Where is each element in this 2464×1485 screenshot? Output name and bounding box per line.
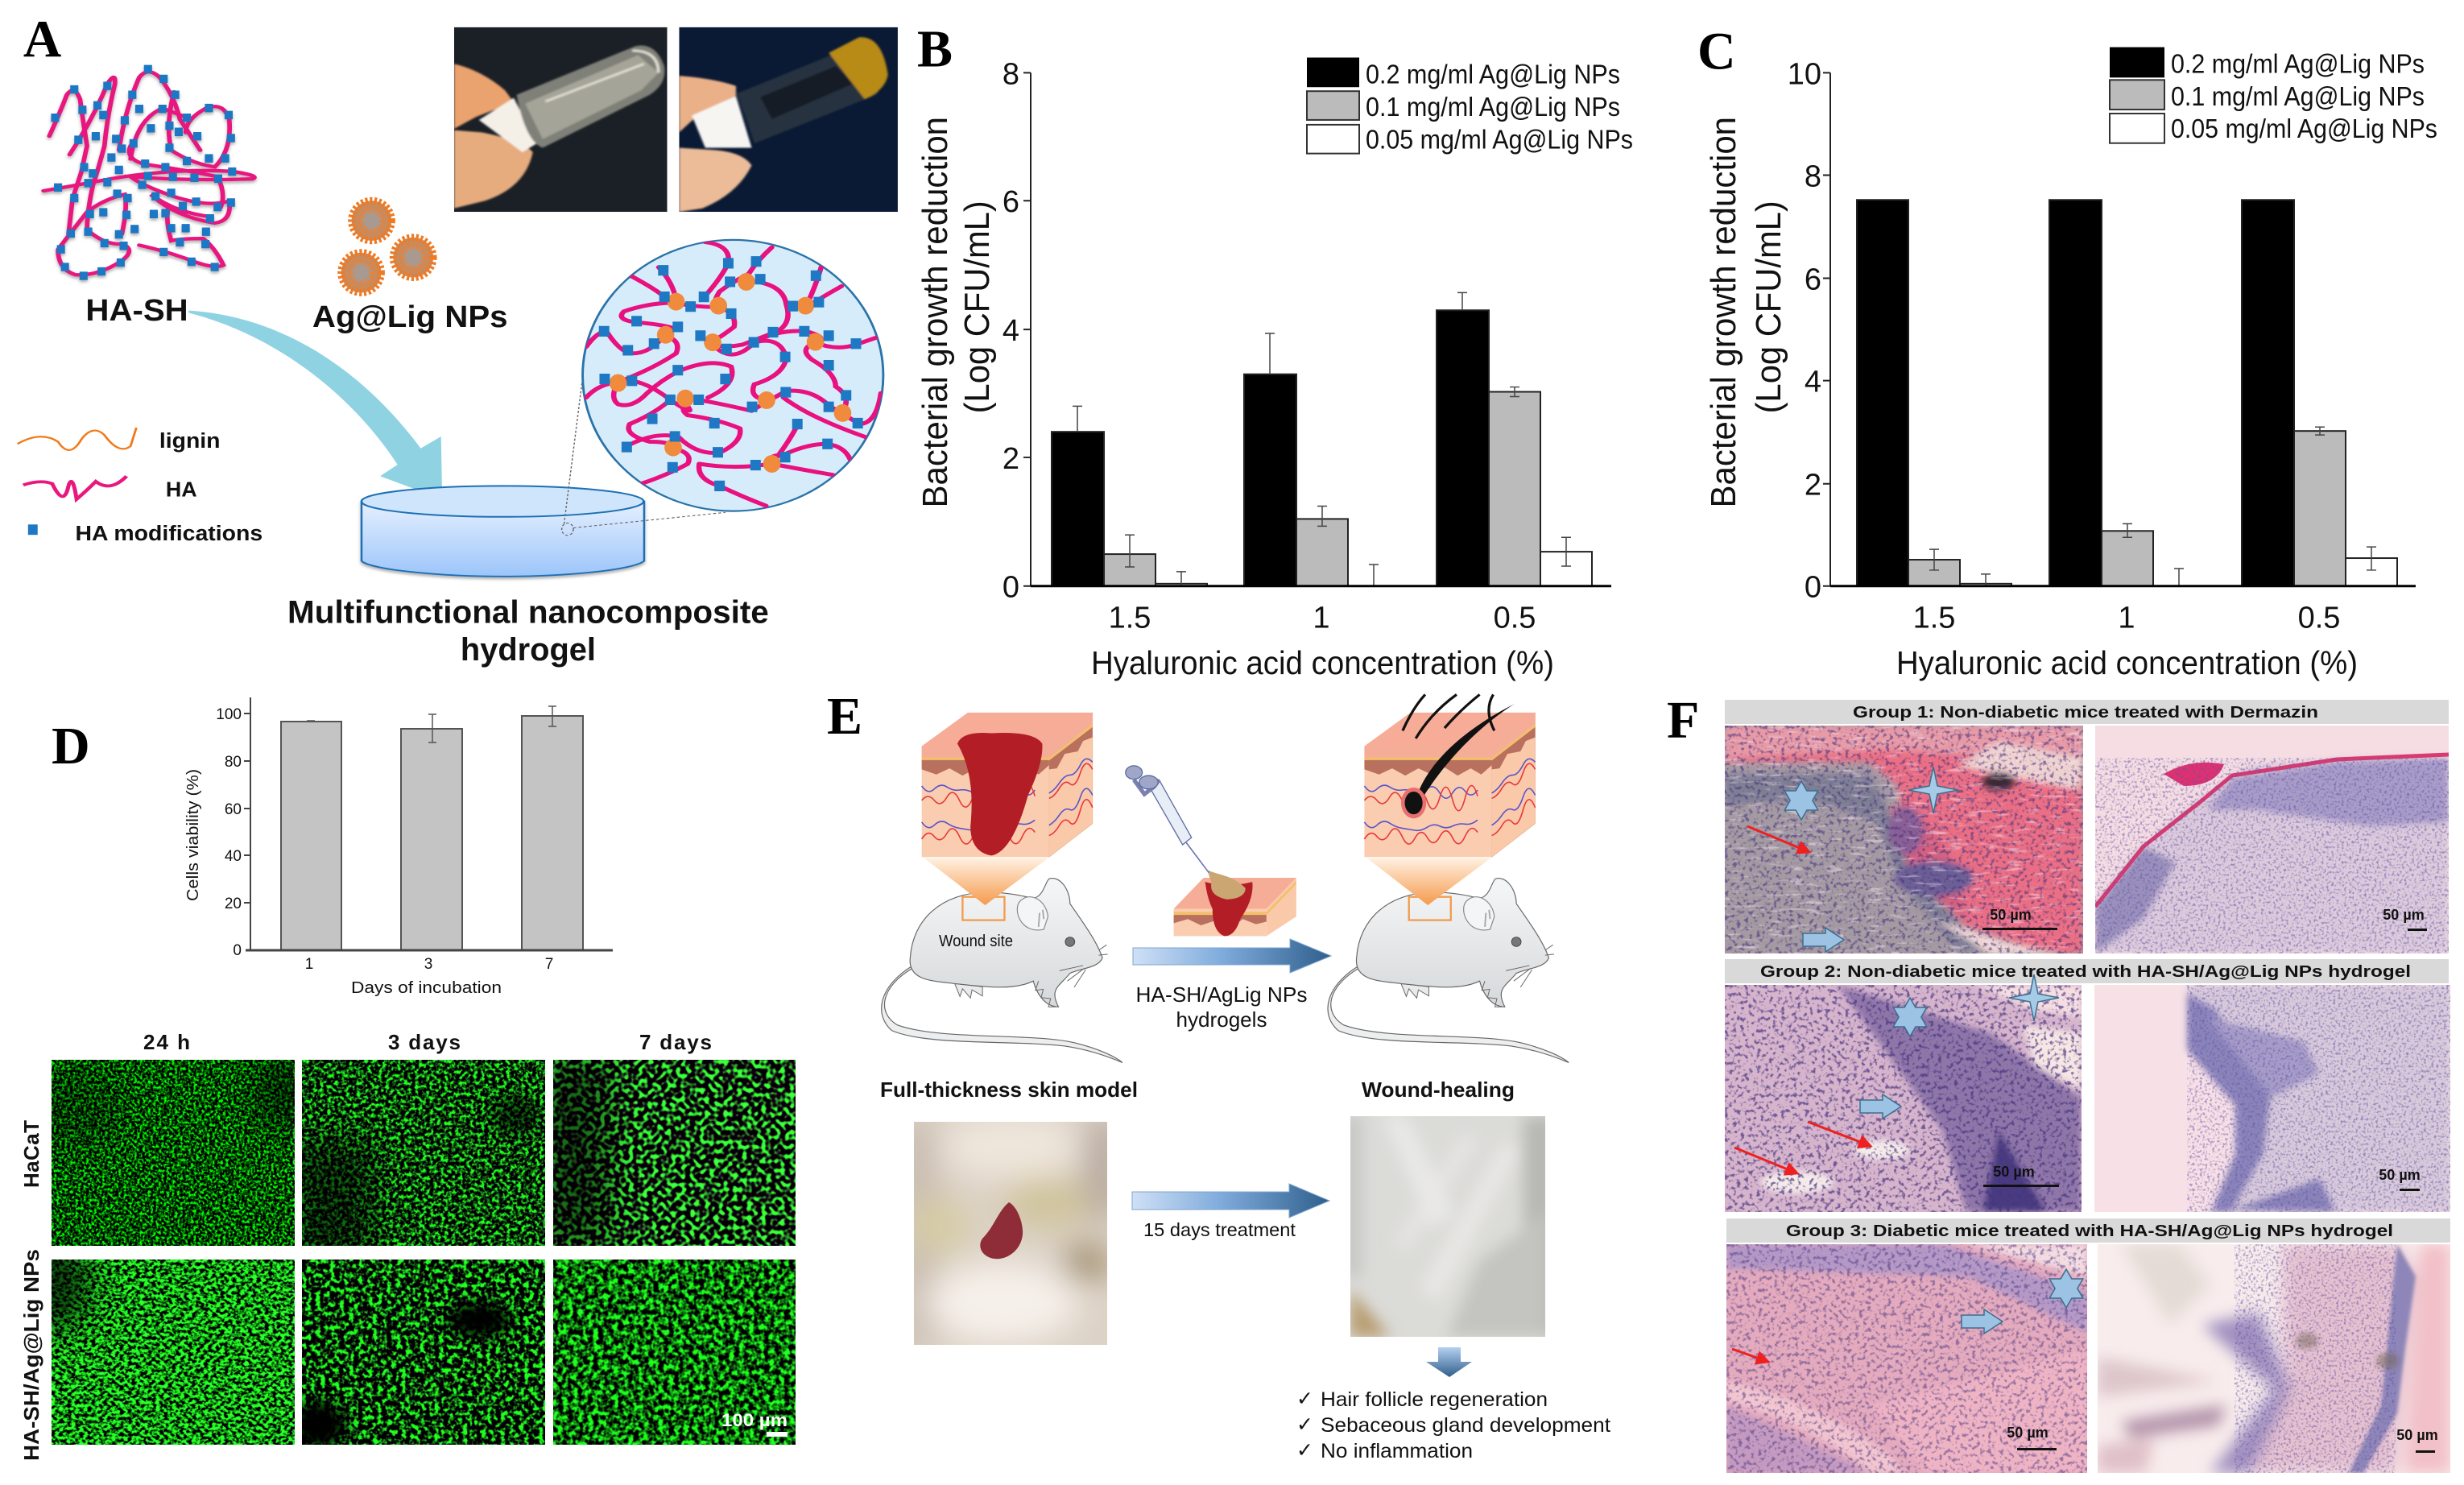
- curved arrow to dish: [188, 311, 442, 499]
- y axis and ticks: [1003, 57, 1031, 605]
- y axis and ticks: 8: [1003, 57, 1019, 91]
- row labels: HaCaT: [19, 1120, 43, 1188]
- y axis and ticks: 2: [1003, 442, 1019, 476]
- hydrogel treatment label: [1135, 982, 1308, 1032]
- hydrogel treatment label: HA-SH/AgLig NPs: [1135, 982, 1308, 1007]
- panel D: cell viability and fluorescence: [11, 697, 796, 1461]
- HA-SH label: HA-SH: [85, 294, 188, 328]
- hydrogel caption: [287, 594, 769, 668]
- legend: lignin / HA / modifications: lignin: [159, 430, 221, 453]
- error bars: [1929, 427, 2376, 586]
- x axis labels: 1: [2118, 602, 2135, 635]
- outcomes checklist: ✓: [1296, 1439, 1313, 1462]
- cell viability bar chart: 1: [305, 956, 313, 973]
- cell viability bar chart: 40: [225, 848, 242, 865]
- HA-SH polymer tangle: [43, 65, 254, 280]
- fluorescence micrograph hydrogel 7 days with scale: [553, 1260, 796, 1445]
- cell viability bar chart: 80: [225, 754, 242, 771]
- cell viability bar chart: 100: [216, 706, 242, 723]
- panel E: in vivo wound healing: [827, 687, 1610, 1462]
- outcomes checklist: Sebaceous gland development: [1321, 1414, 1610, 1437]
- fluorescence micrograph hydrogel 3 days: [302, 1260, 545, 1445]
- outcomes checklist: Hair follicle regeneration: [1321, 1388, 1548, 1411]
- baseline: [1031, 585, 1611, 587]
- x axis labels: 0.5: [1494, 602, 1536, 635]
- cell viability bar chart: 60: [225, 801, 242, 818]
- group 1 heading: Group 1: Non-diabetic mice treated with Dermazin: [1853, 704, 2318, 722]
- x axis title: Hyaluronic acid concentration (%): [1091, 644, 1554, 681]
- y axis and ticks: 4: [1003, 314, 1019, 348]
- Ag@Lig nanoparticles: [341, 201, 433, 292]
- y axis and ticks: 0: [1003, 571, 1019, 605]
- column headers: [143, 1030, 712, 1054]
- legend: [1307, 57, 1633, 155]
- bars: [1052, 310, 1592, 586]
- y axis and ticks: 4: [1805, 366, 1821, 399]
- group 1 left micrograph: [1725, 726, 2083, 953]
- y axis and ticks: 6: [1805, 263, 1821, 296]
- cell viability bar chart: Days of incubation: [351, 979, 502, 997]
- cell viability bar chart: 0: [233, 942, 242, 959]
- outcomes checklist: [1296, 1388, 1610, 1462]
- y axis title: Bacterial growth reduction: [1704, 117, 1743, 507]
- x axis labels: [1109, 602, 1536, 635]
- panel F: histology: [1667, 691, 2450, 1473]
- y axis and ticks: 10: [1788, 57, 1821, 91]
- fluorescence micrograph hydrogel 7 days with scale: 100 µm: [721, 1410, 788, 1430]
- legend: [2110, 48, 2437, 144]
- legend: 0.2 mg/ml Ag@Lig NPs: [1366, 59, 1620, 89]
- x axis labels: [1913, 602, 2340, 635]
- y axis title: (Log CFU/mL): [1749, 201, 1788, 413]
- x axis labels: 1.5: [1913, 602, 1955, 635]
- fluorescence micrograph HaCaT 3 days: [302, 1060, 545, 1246]
- group 1 right micrograph: [2095, 726, 2449, 953]
- scale bars: [1982, 907, 2438, 1453]
- y axis and ticks: 2: [1805, 469, 1821, 503]
- fluorescence micrograph HaCaT 7 days: [553, 1060, 796, 1246]
- y axis and ticks: 8: [1805, 159, 1821, 193]
- group 3 right micrograph: [2098, 1244, 2450, 1473]
- legend: lignin / HA / modifications: [18, 428, 263, 545]
- cell viability bar chart: Cells viability (%): [184, 769, 202, 901]
- wound site text: Wound site: [939, 933, 1013, 950]
- group 2 left micrograph: [1725, 985, 2082, 1212]
- vial photos: [454, 27, 898, 212]
- syringe injecting hydrogel: [1126, 766, 1296, 936]
- label A: A: [23, 11, 61, 68]
- group 3 left micrograph: [1726, 1244, 2087, 1473]
- y axis title: Bacterial growth reduction: [916, 117, 955, 507]
- scale bars: 50 µm: [1990, 907, 2032, 923]
- network magnified circle: [583, 240, 883, 511]
- y axis and ticks: 0: [1805, 571, 1821, 605]
- bars: [1857, 200, 2397, 586]
- hydrogel treatment label: hydrogels: [1176, 1007, 1267, 1032]
- row labels: HA-SH/Ag@Lig NPs: [19, 1249, 43, 1461]
- healed skin block with hair: [1364, 694, 1536, 905]
- legend: 0.2 mg/ml Ag@Lig NPs: [2171, 48, 2425, 79]
- full-thickness heading: Full-thickness skin model: [880, 1078, 1138, 1102]
- wound photo: [914, 1122, 1107, 1345]
- healed fur photo: [1350, 1116, 1545, 1337]
- hydrogel dish: [362, 486, 644, 577]
- column headers: 3 days: [388, 1030, 461, 1054]
- legend: lignin / HA / modifications: HA modifications: [75, 523, 263, 545]
- hydrogel caption: Multifunctional nanocomposite: [287, 594, 769, 630]
- x axis labels: 1: [1313, 602, 1330, 635]
- y axis and ticks: [1788, 57, 1830, 605]
- panel B: bacterial growth reduction chart: [916, 20, 1633, 681]
- y axis title: [1704, 117, 1788, 507]
- baseline: [1830, 585, 2416, 587]
- y axis title: (Log CFU/mL): [957, 201, 997, 413]
- group 3 heading: Group 3: Diabetic mice treated with HA-SH/Ag@Lig NPs hydrogel: [1786, 1222, 2393, 1240]
- cell viability bar chart: 20: [225, 896, 242, 912]
- scale bars: 50 µm: [2383, 907, 2425, 923]
- down arrow: [1426, 1347, 1472, 1377]
- Ag@Lig NPs label: Ag@Lig NPs: [312, 300, 508, 334]
- mouse with wound illustrations: [882, 879, 1569, 1062]
- label F: F: [1667, 691, 1699, 750]
- scale bars: 50 µm: [2007, 1425, 2049, 1441]
- y axis title: [916, 117, 997, 507]
- scale bars: 50 µm: [2396, 1427, 2438, 1443]
- legend: 0.05 mg/ml Ag@Lig NPs: [1366, 125, 1633, 155]
- group 3 heading: [1726, 1218, 2450, 1243]
- legend: 0.05 mg/ml Ag@Lig NPs: [2171, 114, 2437, 144]
- column headers: 7 days: [639, 1030, 712, 1054]
- wounded skin block: [922, 713, 1093, 905]
- group 1 heading: [1725, 700, 2449, 724]
- group 2 heading: [1725, 959, 2449, 983]
- panel C: bacterial growth reduction chart: [1697, 23, 2437, 681]
- label E: E: [827, 687, 862, 746]
- label B: B: [917, 20, 953, 78]
- outcomes checklist: ✓: [1296, 1413, 1313, 1436]
- x axis title: Hyaluronic acid concentration (%): [1896, 644, 2358, 681]
- group 2 heading: Group 2: Non-diabetic mice treated with HA-SH/Ag@Lig NPs hydrogel: [1760, 963, 2411, 981]
- column headers: 24 h: [143, 1030, 190, 1054]
- annotations: stars, sparkles, arrows: [1732, 767, 2083, 1362]
- row labels: [19, 1120, 43, 1461]
- legend: 0.1 mg/ml Ag@Lig NPs: [2171, 81, 2425, 112]
- group 2 right micrograph: [2094, 985, 2450, 1212]
- 15 days treatment label: 15 days treatment: [1143, 1219, 1296, 1240]
- x axis labels: 0.5: [2298, 602, 2340, 635]
- label C: C: [1697, 23, 1736, 81]
- cell viability bar chart: 7: [545, 956, 553, 973]
- fluorescence micrograph HaCaT 24 h: [52, 1060, 295, 1246]
- cell viability bar chart: [184, 697, 613, 997]
- arrow: injection: [1133, 939, 1331, 973]
- y axis and ticks: 6: [1003, 185, 1019, 219]
- error bars: [1073, 292, 1571, 586]
- legend: 0.1 mg/ml Ag@Lig NPs: [1366, 92, 1620, 122]
- cell viability bar chart: 3: [424, 956, 432, 973]
- arrow: 15 days: [1132, 1184, 1329, 1218]
- scale bars: 50 µm: [1993, 1164, 2035, 1180]
- outcomes checklist: No inflammation: [1321, 1440, 1473, 1462]
- wound-healing heading: Wound-healing: [1362, 1078, 1515, 1102]
- x axis labels: 1.5: [1109, 602, 1151, 635]
- legend: lignin / HA / modifications: HA: [166, 479, 197, 502]
- scale bars: 50 µm: [2379, 1167, 2421, 1183]
- zoom callout lines: [562, 382, 726, 536]
- panel A: hydrogel synthesis scheme: [18, 11, 898, 668]
- outcomes checklist: ✓: [1296, 1388, 1313, 1410]
- fluorescence micrograph hydrogel 24 h: [52, 1260, 295, 1445]
- hydrogel caption: hydrogel: [461, 632, 596, 668]
- label D: D: [52, 717, 90, 776]
